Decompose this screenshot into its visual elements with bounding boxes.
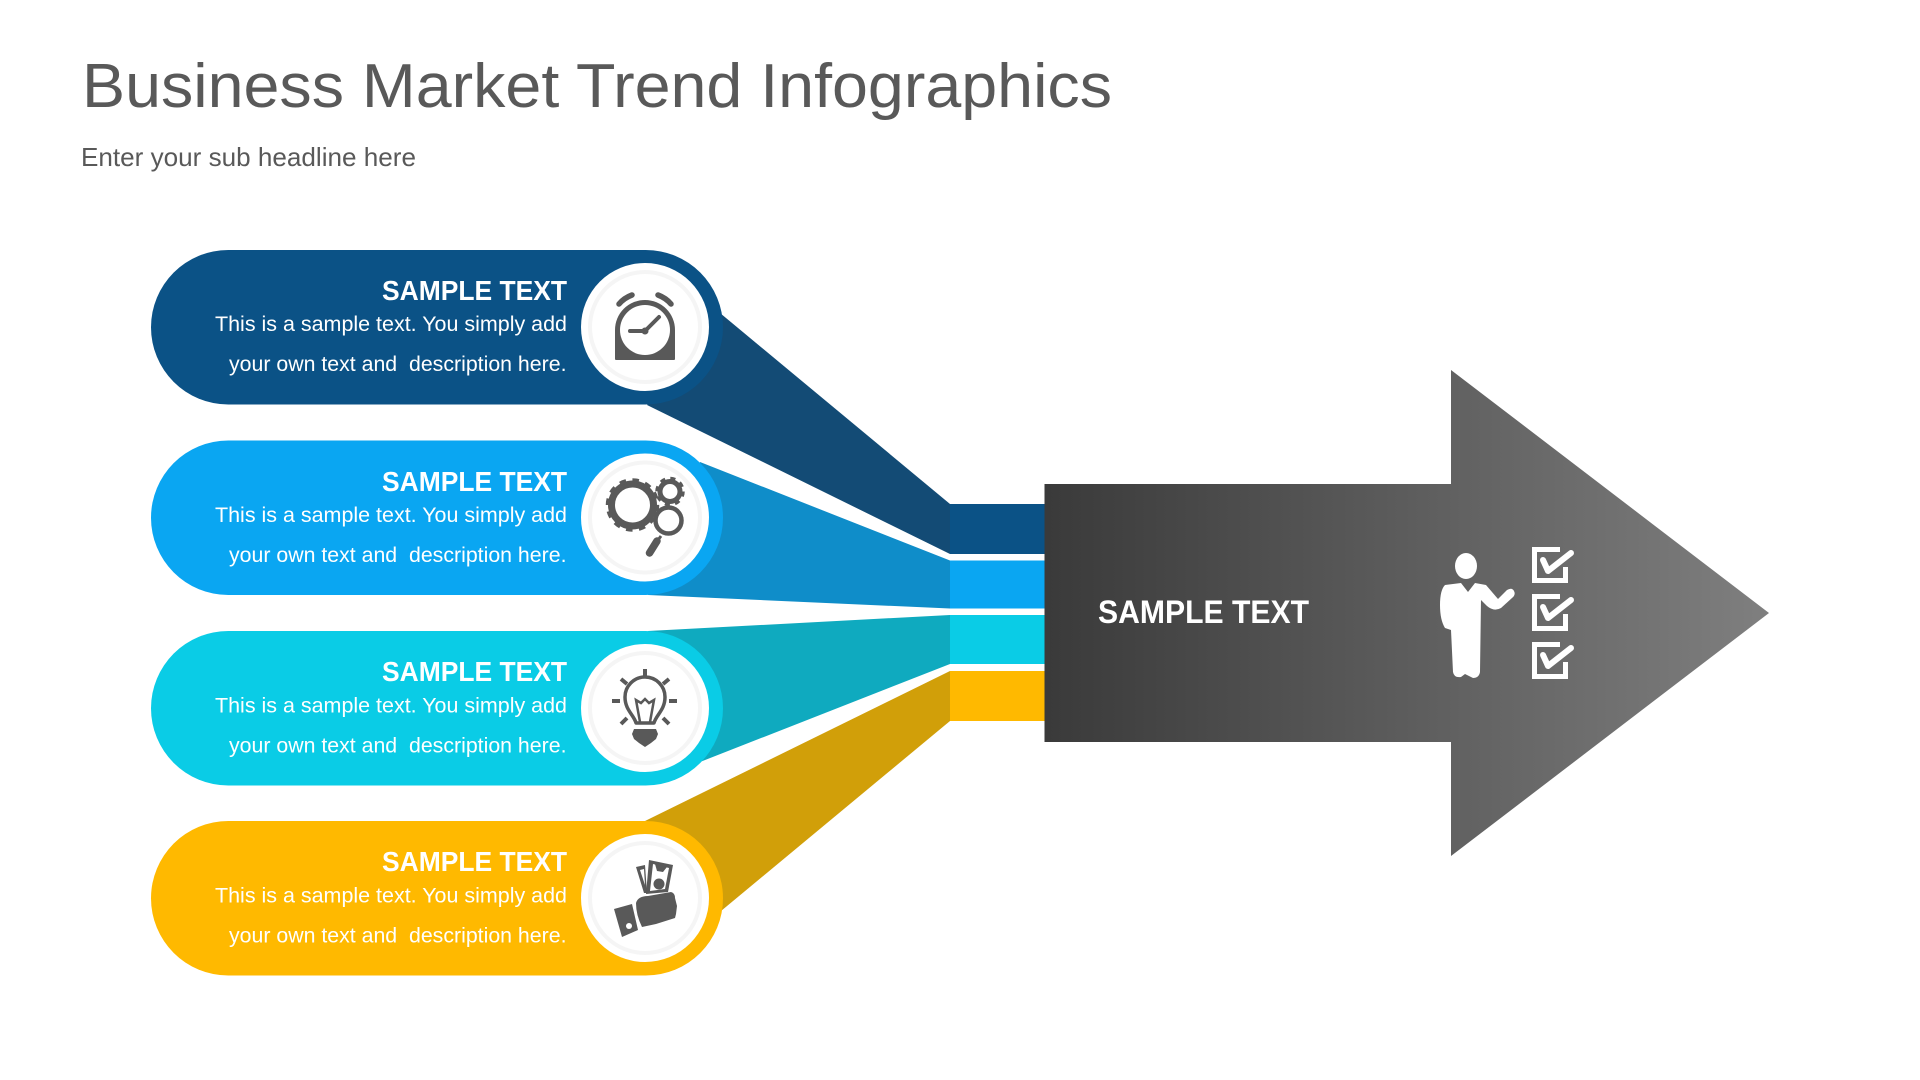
heading: card 3: SAMPLE TEXT <box>382 656 567 687</box>
body text: card 2 <box>215 504 567 567</box>
icon circle: card 2 <box>581 454 709 582</box>
body text: card 4 <box>215 884 567 948</box>
body text: card 3 <box>215 694 567 758</box>
body text: card 1: your own text and description here. <box>229 353 566 376</box>
panel: card 4 yellow <box>151 671 950 976</box>
connector: yellow <box>645 671 950 911</box>
connector: dark blue <box>647 313 950 554</box>
pill: cyan <box>151 631 723 786</box>
body text: card 2: This is a sample text. You simply add <box>215 504 567 527</box>
icon circle: card 1 <box>581 263 709 391</box>
icon: presenter with checklist <box>1440 550 1571 678</box>
body text: card 4: your own text and description here. <box>229 924 566 948</box>
body text: card 4: This is a sample text. You simply add <box>215 884 567 908</box>
checkbox 2 <box>1534 596 1571 628</box>
arrow label: SAMPLE TEXT <box>1098 594 1309 630</box>
pill: yellow <box>151 821 723 976</box>
checkbox 1 <box>1534 550 1571 580</box>
heading: card 4: SAMPLE TEXT <box>382 846 567 877</box>
icon: gears and magnifier <box>608 478 683 553</box>
body text: card 3: This is a sample text. You simply add <box>215 694 567 718</box>
connector strips into arrow <box>950 504 1047 721</box>
panel: card 2 light blue <box>151 440 950 608</box>
heading: card 2: SAMPLE TEXT <box>382 466 567 497</box>
icon: alarm clock <box>615 295 675 360</box>
heading: card 1: SAMPLE TEXT <box>382 275 567 306</box>
panel: card 1 dark blue <box>151 250 950 554</box>
panel: card 3 cyan <box>151 615 950 786</box>
icon circle: card 4 <box>581 834 709 962</box>
connector: cyan <box>648 615 950 762</box>
body text: card 2: your own text and description here. <box>229 544 566 567</box>
arrow: large grey <box>1044 370 1769 856</box>
icon: hand holding money <box>614 860 677 937</box>
pill: light blue <box>151 440 723 595</box>
pill: dark blue <box>151 250 723 404</box>
icon: light bulb <box>612 669 677 747</box>
subtitle: Enter your sub headline here <box>81 142 416 172</box>
body text: card 1 <box>215 313 567 376</box>
icon circle: card 3 <box>581 644 709 772</box>
title: Business Market Trend Infographics <box>82 52 1112 121</box>
connector: light blue <box>648 462 950 608</box>
body text: card 3: your own text and description here. <box>229 734 566 758</box>
presenter figure <box>1440 553 1515 678</box>
checkbox 3 <box>1534 644 1571 676</box>
body text: card 1: This is a sample text. You simply add <box>215 313 567 336</box>
